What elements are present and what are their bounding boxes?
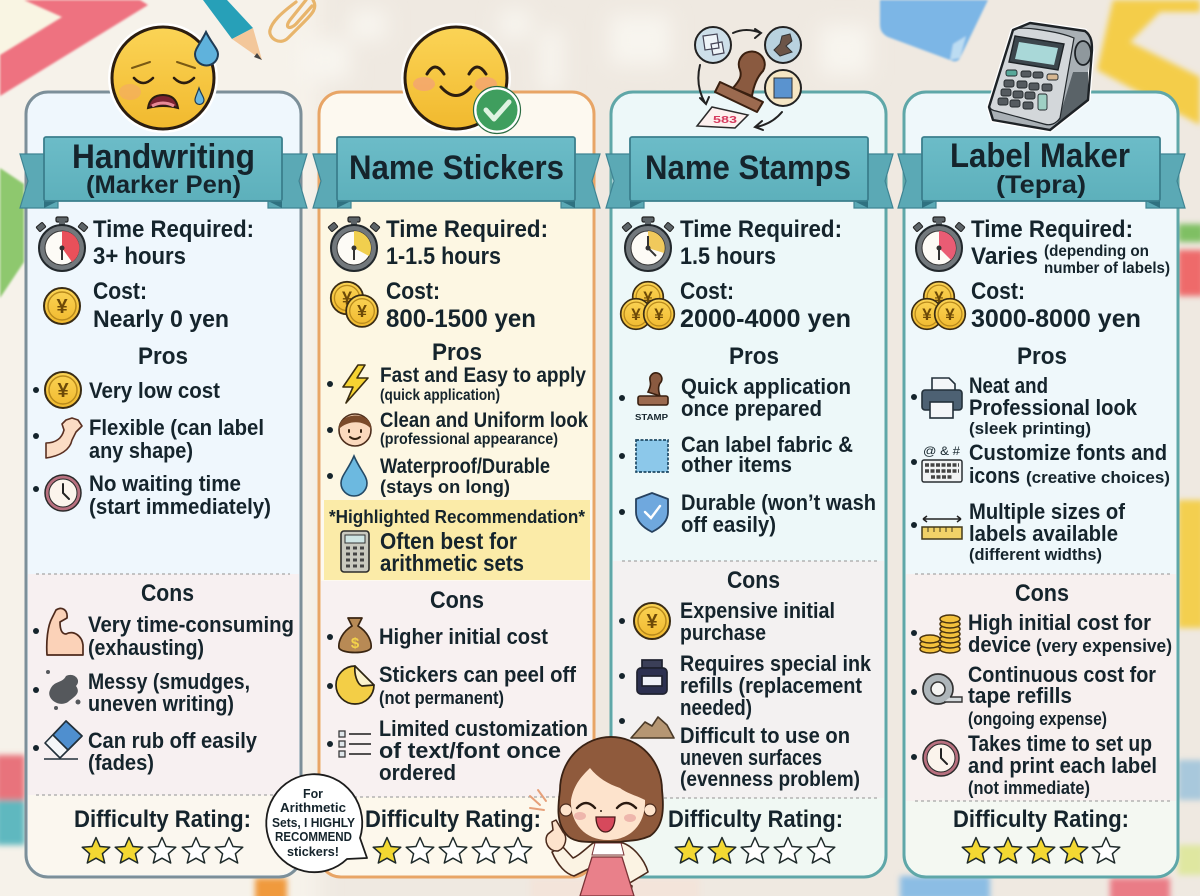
icon: peeling sticker bbox=[336, 666, 374, 704]
highlighted recommendation bbox=[324, 500, 590, 580]
icon: coin bbox=[634, 603, 670, 639]
cost: Cost: bbox=[971, 278, 1025, 305]
heading ribbon: Name Stickers bbox=[349, 149, 564, 187]
cost: Cost: bbox=[680, 278, 734, 305]
pro text: (stays on long) bbox=[380, 477, 510, 497]
pro text: Durable (won’t wash bbox=[681, 490, 876, 515]
heading ribbon: (Tepra) bbox=[996, 171, 1086, 199]
green block left bbox=[0, 168, 24, 298]
difficulty rating bbox=[668, 806, 843, 863]
icon: coin bbox=[45, 372, 81, 408]
icon: stamp: STAMP bbox=[635, 413, 669, 422]
icon: boy face bbox=[339, 414, 371, 446]
rating tint bbox=[906, 801, 1176, 875]
pro text: any shape) bbox=[89, 438, 193, 463]
icon: keyboard with symbols bbox=[922, 444, 962, 482]
pro text: (different widths) bbox=[969, 545, 1102, 564]
card background bbox=[26, 92, 301, 877]
con text bbox=[680, 598, 835, 645]
con text: and print each label bbox=[968, 753, 1157, 778]
con text bbox=[680, 651, 872, 720]
icon: uneven mound bbox=[631, 717, 674, 738]
con text: tape refills bbox=[968, 683, 1072, 708]
highlighted recommendation: Often best for bbox=[380, 528, 517, 554]
difficulty rating: Difficulty Rating: bbox=[953, 806, 1129, 833]
icon: smudge bbox=[46, 670, 80, 710]
cons text bbox=[88, 728, 258, 775]
pro text: Clean and Uniform look bbox=[380, 409, 588, 432]
icon: stopwatch bbox=[622, 217, 674, 271]
cons text: Can rub off easily bbox=[88, 728, 258, 753]
con text: (not permanent) bbox=[379, 688, 504, 708]
difficulty rating bbox=[953, 806, 1129, 863]
icon: stamp process cycle: 583 bbox=[713, 115, 738, 126]
collar bbox=[592, 843, 624, 855]
features bbox=[574, 803, 636, 832]
con text: (evenness problem) bbox=[680, 768, 860, 791]
panel: name stickers bbox=[313, 23, 600, 877]
pro text bbox=[969, 440, 1170, 488]
con text: uneven surfaces bbox=[680, 745, 822, 770]
cons text: Messy (smudges, bbox=[88, 669, 250, 694]
icon: coin stack bbox=[920, 615, 960, 653]
paperclip bbox=[270, 0, 315, 41]
icon: smiling face bbox=[401, 23, 520, 134]
speech bubble: For bbox=[303, 786, 323, 801]
pros heading: Pros bbox=[729, 343, 779, 370]
panel: handwriting bbox=[20, 23, 307, 877]
icon: tired face bbox=[108, 23, 218, 133]
rating tint bbox=[321, 797, 592, 875]
heading ribbon: Label Maker bbox=[950, 137, 1130, 175]
pro text bbox=[380, 409, 588, 448]
bullets bbox=[33, 387, 39, 751]
con text: device bbox=[968, 632, 1031, 657]
con text bbox=[680, 723, 860, 791]
pro text bbox=[969, 373, 1138, 438]
cons text: (fades) bbox=[88, 750, 154, 775]
time required: Time Required: bbox=[971, 216, 1133, 243]
pro text: (sleek printing) bbox=[969, 419, 1091, 438]
pro text: Very low cost bbox=[89, 378, 221, 403]
icon: two coins bbox=[331, 282, 378, 327]
heading ribbon bbox=[20, 137, 307, 208]
time required: 1-1.5 hours bbox=[386, 243, 501, 270]
icon: three coins: ¥ bbox=[945, 305, 955, 324]
difficulty rating: Difficulty Rating: bbox=[365, 806, 541, 833]
cons heading: Cons bbox=[727, 567, 780, 594]
con text: Stickers can peel off bbox=[379, 662, 577, 687]
con text: Continuous cost for bbox=[968, 662, 1156, 687]
icon: three coins bbox=[621, 282, 674, 329]
sparkle lines bbox=[530, 790, 546, 810]
heading ribbon bbox=[606, 137, 893, 208]
difficulty rating: Difficulty Rating: bbox=[74, 806, 251, 833]
con text: refills (replacement bbox=[680, 673, 863, 698]
icon: fabric bbox=[636, 440, 668, 472]
icon: three coins: ¥ bbox=[922, 305, 932, 324]
cons text: Very time-consuming bbox=[88, 612, 294, 637]
heading ribbon bbox=[898, 137, 1185, 208]
arms and blouse bbox=[552, 843, 648, 896]
pro text: once prepared bbox=[681, 396, 822, 421]
ears bbox=[560, 804, 572, 816]
pro text bbox=[380, 455, 550, 497]
pros heading: Pros bbox=[138, 343, 188, 370]
icon: stopwatch bbox=[913, 217, 965, 271]
icon: two coins: ¥ bbox=[357, 301, 367, 321]
pro text bbox=[380, 364, 586, 404]
con text: High initial cost for bbox=[968, 610, 1151, 635]
cost: Cost: bbox=[386, 278, 440, 305]
pros heading: Pros bbox=[432, 339, 482, 366]
time required: Varies bbox=[971, 243, 1038, 270]
pro text: Quick application bbox=[681, 374, 851, 399]
rating tint bbox=[613, 798, 884, 875]
pro text: icons bbox=[969, 463, 1020, 488]
cost: 800-1500 yen bbox=[386, 305, 536, 333]
icon: label printer bbox=[989, 23, 1092, 130]
pro text bbox=[89, 471, 271, 519]
time required: Time Required: bbox=[93, 216, 254, 243]
icon: coin: ¥ bbox=[646, 611, 658, 633]
icon: three coins bbox=[912, 282, 965, 329]
con text bbox=[379, 662, 577, 708]
pro text: other items bbox=[681, 452, 792, 477]
icon: coin: ¥ bbox=[57, 380, 69, 402]
icon: list bbox=[339, 731, 371, 757]
icon: stamp process cycle bbox=[695, 27, 801, 130]
con text: (ongoing expense) bbox=[968, 709, 1107, 729]
difficulty rating bbox=[365, 806, 541, 863]
pro text: Can label fabric & bbox=[681, 432, 853, 457]
icon: eraser bbox=[44, 721, 82, 759]
icon: lightning bbox=[343, 365, 368, 403]
pink triangle ruler bbox=[0, 0, 148, 96]
bullets bbox=[619, 395, 625, 724]
time required: number of labels) bbox=[1044, 260, 1170, 277]
difficulty rating: Difficulty Rating: bbox=[668, 806, 843, 833]
bullets bbox=[911, 394, 917, 760]
heading ribbon: (Marker Pen) bbox=[86, 171, 241, 199]
time required: Time Required: bbox=[680, 216, 842, 243]
pro text: (creative choices) bbox=[1026, 468, 1170, 487]
cost: Nearly 0 yen bbox=[93, 306, 229, 333]
time required: Time Required: bbox=[386, 216, 548, 243]
cons tint bbox=[28, 574, 299, 795]
difficulty rating bbox=[74, 806, 251, 863]
speech bubble: Arithmetic bbox=[280, 800, 346, 815]
icon: keyboard with symbols: @ & # bbox=[923, 444, 960, 458]
pro text bbox=[681, 490, 876, 537]
cons tint bbox=[613, 561, 884, 798]
time required: 1.5 hours bbox=[680, 243, 776, 270]
time required: 3+ hours bbox=[93, 243, 186, 270]
cost bbox=[680, 278, 851, 333]
pro text: Fast and Easy to apply bbox=[380, 364, 586, 387]
bullets bbox=[327, 381, 333, 747]
con text: Higher initial cost bbox=[379, 624, 549, 649]
cons heading: Cons bbox=[430, 587, 484, 614]
right edge stationery bbox=[0, 224, 1200, 896]
icon: stopwatch bbox=[328, 217, 380, 271]
con text: Requires special ink bbox=[680, 651, 872, 676]
time required: (depending on bbox=[1044, 243, 1149, 260]
con text: Limited customization bbox=[379, 716, 588, 741]
con text: ordered bbox=[379, 760, 456, 785]
pro text: Neat and bbox=[969, 373, 1048, 398]
pro text: labels available bbox=[969, 521, 1118, 546]
con text: Takes time to set up bbox=[968, 731, 1152, 756]
cost bbox=[386, 278, 536, 333]
icon: three coins: ¥ bbox=[643, 288, 653, 307]
icon: three coins: ¥ bbox=[654, 305, 664, 324]
pro text bbox=[969, 499, 1126, 564]
icon: three coins: ¥ bbox=[934, 288, 944, 307]
icon: three coins: ¥ bbox=[631, 305, 641, 324]
pale area inside ruler bbox=[0, 0, 70, 60]
pro text bbox=[681, 374, 851, 421]
cost: 3000-8000 yen bbox=[971, 305, 1141, 333]
con text bbox=[379, 716, 588, 785]
pro text: No waiting time bbox=[89, 471, 241, 496]
speech bubble: stickers! bbox=[287, 844, 339, 859]
pro text: off easily) bbox=[681, 512, 776, 537]
icon: shield bbox=[636, 493, 668, 532]
icon: clock bbox=[923, 740, 959, 776]
highlighted recommendation: *Highlighted Recommendation* bbox=[329, 507, 585, 527]
icon: ink bottle bbox=[637, 660, 667, 694]
icon: stamp bbox=[635, 373, 669, 422]
time required bbox=[971, 216, 1170, 277]
cons text bbox=[88, 612, 294, 660]
con text: (very expensive) bbox=[1036, 636, 1172, 656]
heading ribbon: Handwriting bbox=[72, 138, 255, 176]
time required bbox=[93, 216, 254, 270]
card background bbox=[319, 92, 594, 877]
pointing hand bbox=[546, 820, 566, 851]
rating tint bbox=[28, 795, 299, 875]
icon: clock bbox=[45, 475, 81, 511]
cons text bbox=[88, 669, 250, 716]
cost: Cost: bbox=[93, 278, 147, 305]
face bbox=[571, 768, 645, 840]
blue eraser bbox=[880, 0, 988, 61]
pro text: Professional look bbox=[969, 395, 1138, 420]
pro text bbox=[89, 415, 264, 463]
icon: muscle bbox=[47, 608, 83, 655]
hair bbox=[558, 737, 663, 842]
panel: name stamps bbox=[606, 27, 893, 877]
highlighted tint bbox=[321, 200, 592, 500]
cons tint bbox=[321, 581, 592, 797]
con text: (not immediate) bbox=[968, 778, 1090, 798]
icon: money bag bbox=[339, 618, 371, 652]
yellow triangle ruler bbox=[1097, 0, 1200, 125]
heading ribbon bbox=[313, 137, 600, 208]
pro text: (quick application) bbox=[380, 387, 500, 404]
icon: printer bbox=[922, 378, 962, 418]
icon: check badge bbox=[474, 86, 520, 134]
pro text: Flexible (can label bbox=[89, 415, 264, 440]
panel: label maker bbox=[898, 23, 1185, 877]
pros heading: Pros bbox=[1017, 343, 1067, 370]
con text bbox=[968, 662, 1156, 729]
pro text: Multiple sizes of bbox=[969, 499, 1126, 524]
pro text: Customize fonts and bbox=[969, 440, 1167, 465]
heading ribbon: Name Stamps bbox=[645, 149, 851, 187]
con text: Expensive initial bbox=[680, 598, 835, 623]
cons heading: Cons bbox=[1015, 580, 1069, 607]
icon: ruler bbox=[922, 516, 962, 539]
time required bbox=[386, 216, 548, 270]
cons tint bbox=[906, 574, 1176, 801]
cons heading: Cons bbox=[141, 580, 194, 607]
icon: tape roll bbox=[923, 674, 962, 704]
teal pencil bbox=[203, 0, 262, 60]
icon: two coins: ¥ bbox=[342, 288, 352, 308]
time required bbox=[680, 216, 842, 270]
pro text: (start immediately) bbox=[89, 494, 271, 519]
speech bubble: Sets, I HIGHLY bbox=[272, 815, 355, 830]
cons text: uneven writing) bbox=[88, 691, 234, 716]
icon: coin bbox=[44, 288, 80, 324]
icon: calculator bbox=[341, 531, 369, 572]
cost bbox=[93, 278, 229, 333]
cons text: (exhausting) bbox=[88, 635, 204, 660]
icon: coin: ¥ bbox=[56, 296, 68, 318]
icon: water drop bbox=[341, 456, 367, 496]
pro text: Waterproof/Durable bbox=[380, 455, 550, 478]
con text bbox=[968, 610, 1172, 657]
speech bubble bbox=[266, 774, 367, 872]
icon: stopwatch bbox=[36, 217, 88, 271]
con text: of text/font once bbox=[379, 738, 561, 763]
speech bubble: RECOMMEND bbox=[275, 829, 352, 844]
cost bbox=[971, 278, 1141, 333]
con text: purchase bbox=[680, 620, 766, 645]
icon: arm bbox=[46, 418, 82, 458]
pro text bbox=[681, 432, 853, 477]
character: girl in pink apron bbox=[530, 737, 663, 896]
pro text: (professional appearance) bbox=[380, 431, 558, 448]
cost: 2000-4000 yen bbox=[680, 305, 851, 333]
con text: needed) bbox=[680, 695, 752, 720]
icon: money bag: $ bbox=[351, 635, 360, 652]
con text bbox=[968, 731, 1157, 798]
card background bbox=[611, 92, 886, 877]
apron bbox=[580, 857, 634, 896]
con text: Difficult to use on bbox=[680, 723, 850, 748]
card background bbox=[904, 92, 1178, 877]
highlighted recommendation: arithmetic sets bbox=[380, 550, 524, 576]
